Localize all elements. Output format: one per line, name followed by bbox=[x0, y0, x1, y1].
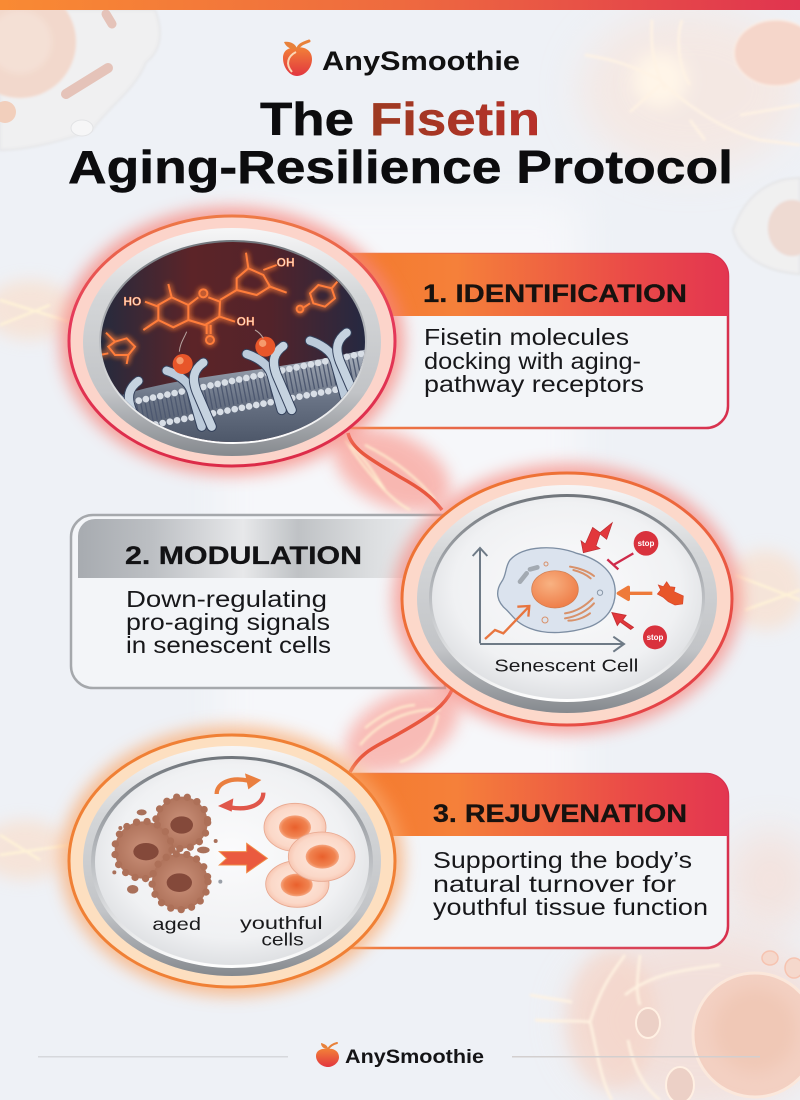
background neuron top-right bbox=[585, 20, 800, 145]
molecule labels: OH bbox=[237, 315, 255, 329]
title: Aging-Resilience Protocol bbox=[68, 141, 733, 193]
panel: 3. rejuvenation bbox=[340, 774, 728, 948]
body text: in senescent cells bbox=[126, 632, 331, 658]
molecule labels bbox=[123, 256, 295, 329]
icon: apple logo bbox=[283, 41, 312, 76]
icon: molecule cluster bbox=[657, 582, 683, 605]
heading: 1. IDENTIFICATION bbox=[423, 280, 687, 308]
background cells bottom-right bbox=[530, 950, 800, 1100]
panel: 1. identification bbox=[340, 254, 728, 428]
footer bbox=[38, 1043, 760, 1068]
background cell right bbox=[733, 178, 800, 274]
labels bbox=[152, 913, 323, 949]
footer divider right bbox=[512, 1056, 760, 1058]
icon: cycle arrows bbox=[217, 773, 263, 812]
body text: Fisetin molecules bbox=[424, 324, 629, 350]
arrow: red lightning bbox=[581, 523, 612, 553]
labels: aged bbox=[152, 914, 201, 934]
title bbox=[68, 93, 733, 193]
body text: docking with aging- bbox=[424, 348, 641, 374]
body text: Down-regulating bbox=[126, 586, 327, 612]
arrow: orange bbox=[618, 587, 652, 599]
logo: AnySmoothie header bbox=[283, 41, 520, 76]
heading: 2. MODULATION bbox=[125, 542, 362, 570]
arrow: red lower bbox=[612, 613, 633, 629]
background cell top-left bbox=[0, 0, 160, 150]
stop sign top: stop bbox=[638, 539, 655, 548]
cell bbox=[498, 548, 615, 633]
circle: senescent cell illustration bbox=[393, 464, 741, 734]
body text: pro-aging signals bbox=[126, 609, 330, 635]
molecule labels: OH bbox=[277, 256, 295, 270]
body text: Supporting the body’s bbox=[433, 847, 692, 873]
circle: molecule docking illustration bbox=[60, 207, 404, 475]
arrow: aged to youthful bbox=[219, 843, 267, 873]
body text: natural turnover for bbox=[433, 871, 676, 897]
stop sign bottom bbox=[643, 625, 667, 649]
footer divider left bbox=[38, 1056, 288, 1058]
top gradient bar bbox=[0, 0, 800, 10]
panel header bbox=[340, 254, 728, 316]
body text: youthful tissue function bbox=[433, 894, 708, 920]
body text bbox=[433, 847, 708, 920]
stop sign bottom: stop bbox=[647, 633, 664, 642]
fisetin molecule bbox=[100, 253, 337, 364]
docked molecules bbox=[173, 330, 275, 374]
molecule labels: HO bbox=[123, 295, 141, 309]
chart axes bbox=[473, 548, 624, 652]
brand name: AnySmoothie bbox=[322, 46, 520, 76]
body text: pathway receptors bbox=[424, 371, 644, 397]
icon: footer apple bbox=[316, 1043, 339, 1067]
youthful cells bbox=[264, 803, 355, 907]
body text bbox=[424, 324, 644, 397]
heading: 3. REJUVENATION bbox=[433, 800, 687, 828]
panel header bbox=[78, 519, 445, 578]
footer brand name: AnySmoothie bbox=[345, 1047, 484, 1068]
labels: cells bbox=[261, 929, 304, 949]
inhibition line bbox=[607, 553, 633, 569]
connector: step 2 to step 3 bbox=[330, 669, 474, 791]
background cell nucleus top-right bbox=[734, 20, 800, 86]
aged cells bbox=[112, 797, 222, 910]
arrow: rising zigzag bbox=[485, 606, 529, 639]
body text bbox=[126, 586, 331, 658]
connector: step 1 to step 2 bbox=[321, 411, 463, 529]
cell membrane bbox=[122, 350, 364, 442]
panel header bbox=[340, 774, 728, 836]
title: Fisetin bbox=[370, 93, 540, 145]
receptors bbox=[118, 328, 354, 432]
stop sign top bbox=[634, 531, 658, 556]
circle: aged to youthful cells illustration bbox=[60, 726, 404, 996]
labels: youthful bbox=[240, 913, 323, 933]
panel: 2. modulation bbox=[71, 515, 445, 688]
title: The bbox=[260, 93, 354, 145]
label: Senescent Cell bbox=[494, 656, 638, 676]
